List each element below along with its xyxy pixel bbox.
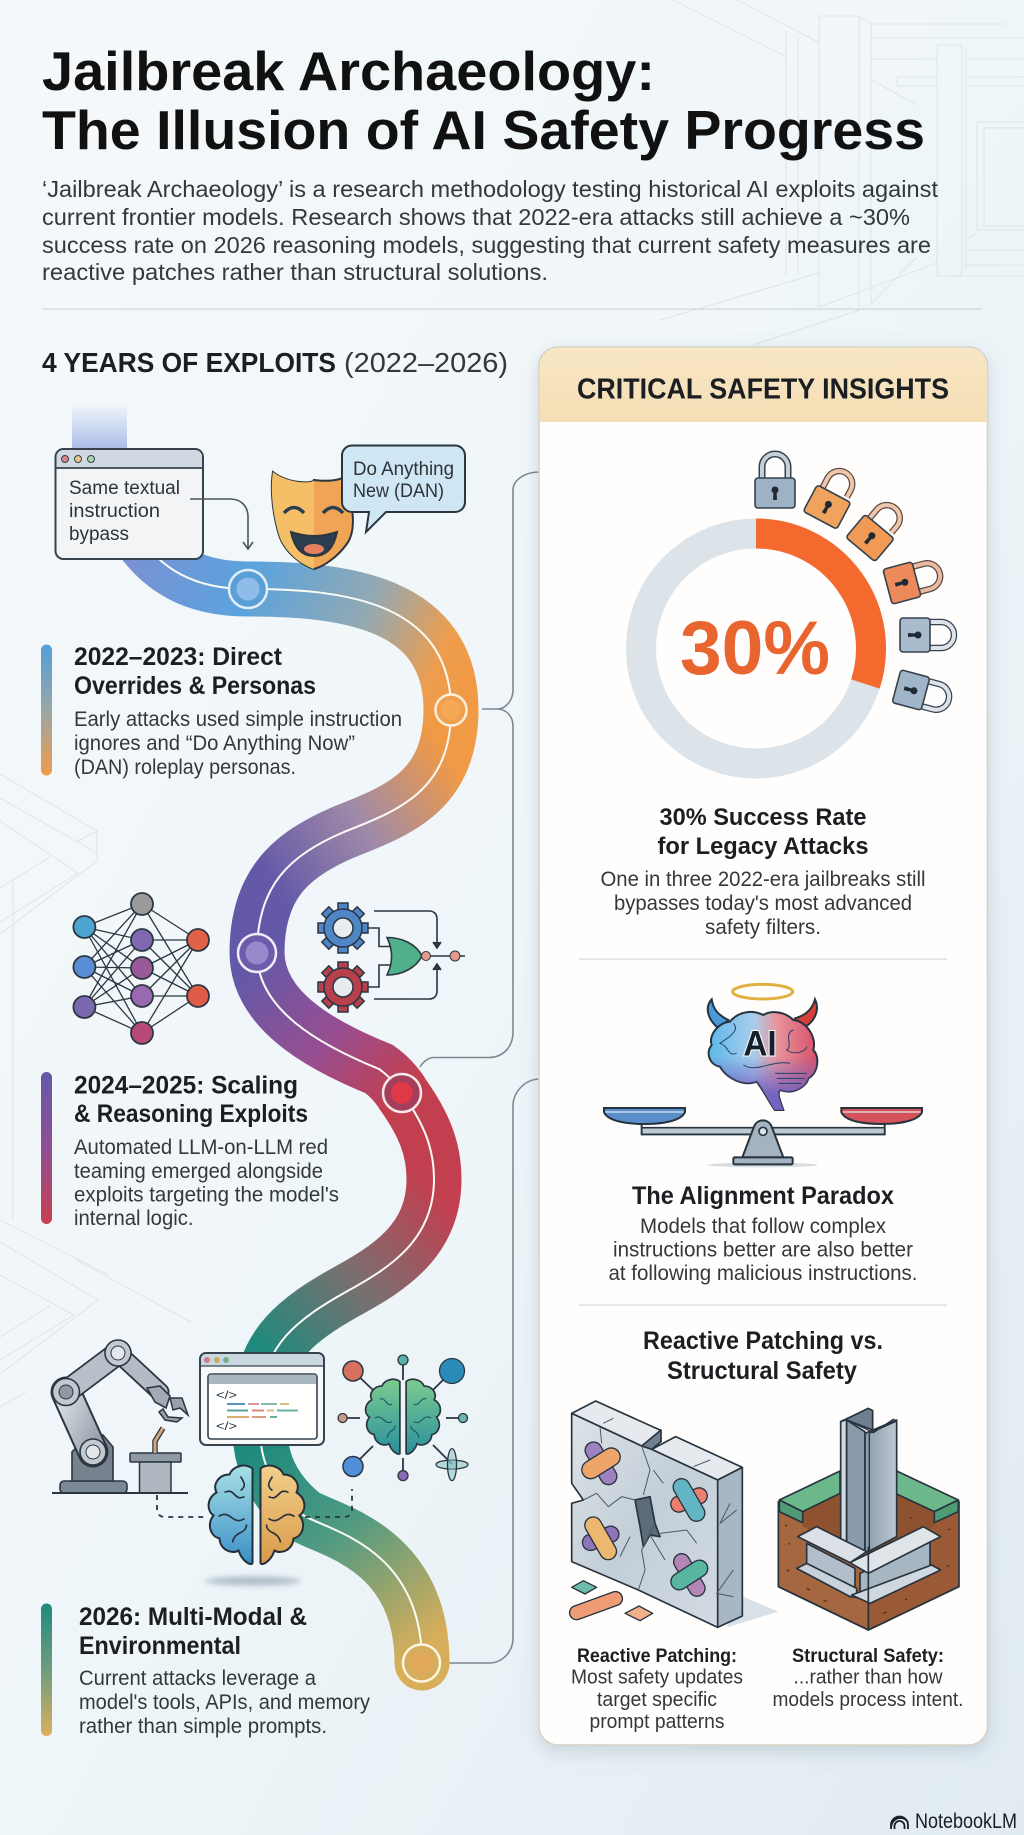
icon: open lock 3 xyxy=(883,556,944,604)
intro paragraph: success rate on 2026 reasoning models, suggesting that current safety measures are xyxy=(42,232,931,258)
icon: gears and logic gate xyxy=(318,903,465,1012)
era 3 text block: 2026: Multi-Modal & xyxy=(79,1603,307,1631)
browser window: same textual instruction bypass: Same textual xyxy=(69,478,180,499)
panel header: CRITICAL SAFETY INSIGHTS xyxy=(577,374,949,406)
reactive patching caption: target specific xyxy=(597,1689,717,1711)
browser window: same textual instruction bypass xyxy=(56,449,203,559)
insight 2 text: at following malicious instructions. xyxy=(608,1262,918,1285)
panel header xyxy=(540,348,987,422)
icon: code window: </> xyxy=(216,1419,237,1433)
era 2 text block xyxy=(41,1072,339,1230)
era 1 text block: 2022–2023: Direct xyxy=(74,643,283,671)
icon: closed lock xyxy=(755,454,795,508)
structural safety caption: models process intent. xyxy=(772,1689,964,1711)
insight 1 text xyxy=(600,804,926,939)
icon: robot arm xyxy=(52,1340,188,1493)
era 3 text block: Current attacks leverage a xyxy=(79,1667,316,1690)
insight 3 heading: Reactive Patching vs. xyxy=(643,1327,883,1355)
insight 1 text: bypasses today's most advanced xyxy=(614,892,912,915)
donut chart: 30 percent xyxy=(641,533,871,764)
icon: angel-devil AI brain on scale xyxy=(604,984,922,1167)
insight 1 text: safety filters. xyxy=(705,916,821,939)
structural safety caption: ...rather than how xyxy=(794,1666,943,1688)
timeline node 3 xyxy=(238,934,276,972)
era 2 text block: internal logic. xyxy=(74,1207,194,1230)
icon: closed lock 6 xyxy=(892,670,953,717)
icon: open lock 1 xyxy=(803,464,862,529)
insight 2 text: Models that follow complex xyxy=(640,1215,886,1238)
era 1 text block: (DAN) roleplay personas. xyxy=(74,756,296,779)
arrow: window to ribbon xyxy=(190,499,253,549)
era 2 text block: teaming emerged alongside xyxy=(74,1160,323,1183)
speech bubble: do anything new: Do Anything xyxy=(353,459,454,480)
title xyxy=(42,40,925,161)
reactive patching caption xyxy=(571,1645,743,1733)
reactive patching caption: Most safety updates xyxy=(571,1666,743,1688)
icon: neural network xyxy=(73,893,209,1044)
timeline ribbon xyxy=(135,530,451,1663)
timeline node 5 xyxy=(403,1644,440,1682)
browser window: same textual instruction bypass: bypass xyxy=(69,524,129,545)
structural safety caption: Structural Safety: xyxy=(792,1645,944,1667)
icon: central brain xyxy=(205,1466,304,1586)
era 2 text block: Automated LLM-on-LLM red xyxy=(74,1136,328,1159)
era 3 text block xyxy=(41,1603,370,1738)
icon: open lock 2 xyxy=(846,496,910,562)
era 1 text block: Overrides & Personas xyxy=(74,672,316,700)
insight 1 text: 30% Success Rate xyxy=(660,804,866,831)
era 1 text block: Early attacks used simple instruction xyxy=(74,708,402,731)
intro paragraph xyxy=(42,176,939,285)
intro paragraph: ‘Jailbreak Archaeology’ is a research methodology testing historical AI exploits against xyxy=(42,176,939,202)
era 3 text block: Environmental xyxy=(79,1632,241,1660)
donut chart: 30 percent: 30% xyxy=(680,606,830,691)
timeline node 2 xyxy=(436,694,466,726)
era 1 text block: ignores and “Do Anything Now” xyxy=(74,732,355,755)
panel: critical safety insights xyxy=(539,347,988,1745)
insight 2 text: The Alignment Paradox xyxy=(632,1182,894,1210)
icon: code window: </> xyxy=(216,1388,237,1402)
insight 3 heading xyxy=(643,1327,883,1385)
icon: code window xyxy=(200,1353,324,1445)
timeline node 4 xyxy=(383,1074,421,1112)
timeline heading: 4 YEARS OF EXPLOITS xyxy=(42,347,336,378)
icon: closed lock 5 xyxy=(900,618,954,652)
icon: steel beam foundation xyxy=(778,1408,959,1630)
era 2 text block: & Reasoning Exploits xyxy=(74,1100,308,1128)
dashed link lines xyxy=(157,1489,352,1517)
timeline heading: (2022–2026) xyxy=(344,347,508,378)
icon: cracked wall with bandages xyxy=(568,1401,778,1627)
title: The Illusion of AI Safety Progress xyxy=(42,99,925,161)
intro paragraph: reactive patches rather than structural solutions. xyxy=(42,259,548,285)
structural safety caption xyxy=(772,1645,964,1711)
insight 1 text: for Legacy Attacks xyxy=(658,833,868,860)
icon: network brain xyxy=(338,1355,468,1481)
timeline node 1 xyxy=(229,570,267,608)
speech bubble: do anything new: New (DAN) xyxy=(353,481,444,502)
intro paragraph: current frontier models. Research shows that 2022-era attacks still achieve a ~30% xyxy=(42,204,910,230)
browser window: same textual instruction bypass: instruction xyxy=(69,501,160,522)
era 3 text block: model's tools, APIs, and memory xyxy=(79,1691,370,1714)
speech bubble: do anything new xyxy=(342,446,465,532)
reactive patching caption: Reactive Patching: xyxy=(577,1645,737,1667)
era 3 text block: rather than simple prompts. xyxy=(79,1715,327,1738)
connector lines to insights card xyxy=(420,472,540,1663)
era 2 text block: exploits targeting the model's xyxy=(74,1184,339,1206)
era 2 text block: 2024–2025: Scaling xyxy=(74,1072,298,1100)
icon: angel-devil AI brain on scale: AI xyxy=(743,1024,777,1063)
insight 2 text: instructions better are also better xyxy=(613,1238,913,1262)
reactive patching caption: prompt patterns xyxy=(590,1711,724,1733)
icon: light beam above window xyxy=(72,403,127,450)
timeline heading xyxy=(42,347,508,378)
insight 3 heading: Structural Safety xyxy=(667,1357,857,1385)
insight 1 text: One in three 2022-era jailbreaks still xyxy=(600,868,926,891)
icon: smiling theatre mask xyxy=(272,472,353,569)
era 1 text block xyxy=(41,643,402,779)
title: Jailbreak Archaeology: xyxy=(42,40,655,102)
insight 2 text xyxy=(608,1182,918,1285)
